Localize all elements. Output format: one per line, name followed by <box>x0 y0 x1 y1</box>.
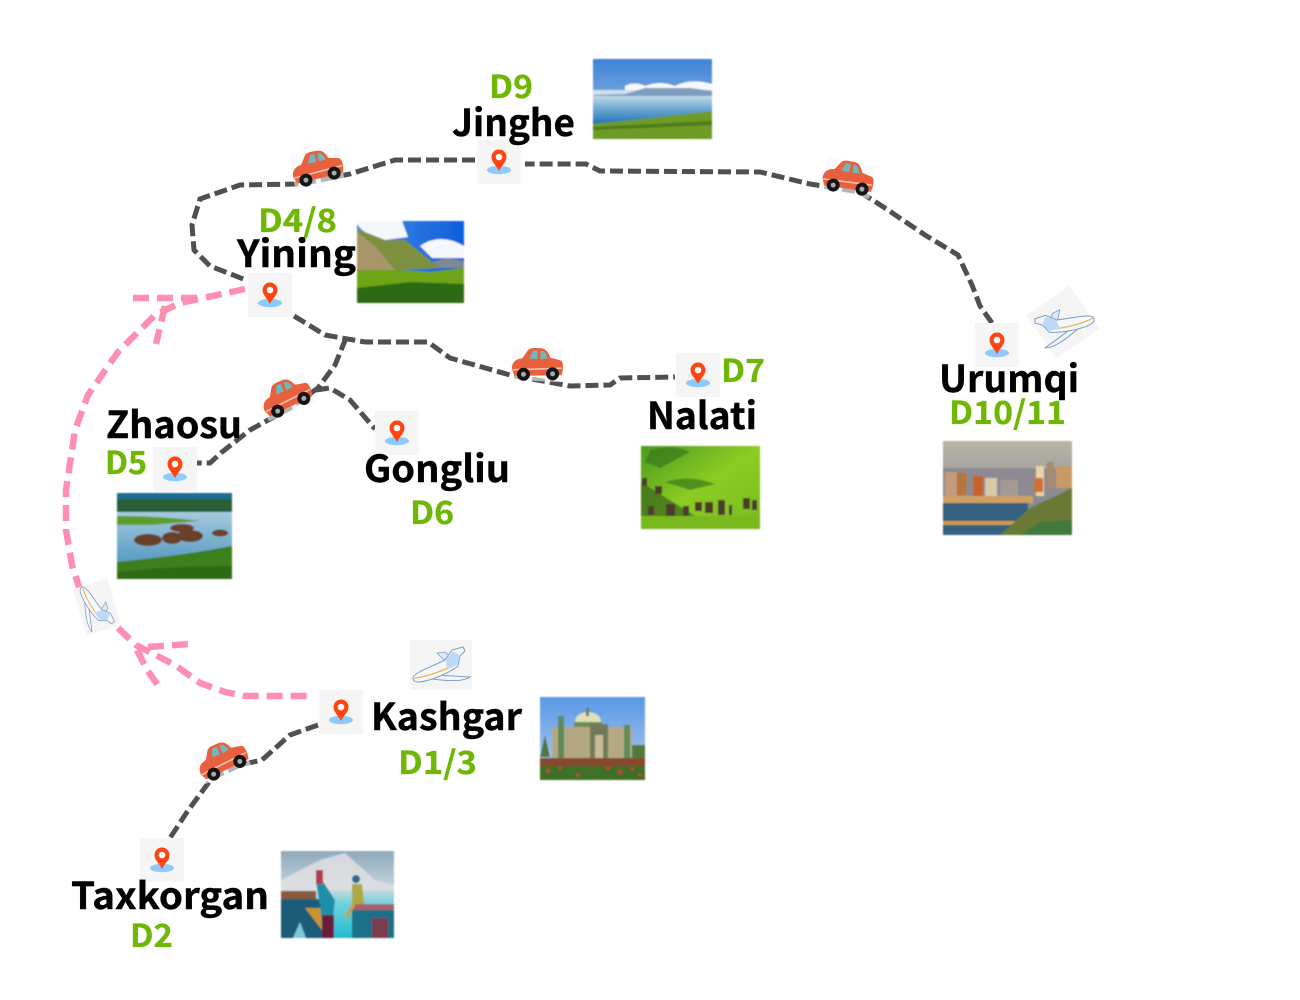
icon: car on Jinghe-Yining road <box>289 147 345 189</box>
label: D5: D5 <box>105 438 147 484</box>
pin: Yining <box>248 273 292 317</box>
label: D10/11: D10/11 <box>949 388 1066 434</box>
stop: Zhaosu <box>105 395 242 579</box>
name: Urumqi: Urumqi <box>939 349 1079 403</box>
icon: car on Zhaosu road <box>256 371 316 422</box>
stop: Jinghe <box>452 59 712 184</box>
route: Yining to Nalati <box>294 316 675 386</box>
icon: car on Kashgar-Taxkorgan road <box>192 734 252 785</box>
pin: Kashgar <box>319 690 363 734</box>
label: D4/8: D4/8 <box>258 196 337 242</box>
icon: plane at Kashgar <box>410 640 472 690</box>
icon: plane at Urumqi <box>1027 286 1099 358</box>
label: D2: D2 <box>130 911 173 957</box>
pin: Jinghe <box>477 140 521 184</box>
photo: lake with green shore <box>593 59 712 139</box>
photo: green mountain valley <box>357 221 464 303</box>
icon: plane on flight path <box>73 579 121 635</box>
photo: city skyline <box>943 441 1072 535</box>
name: Yining: Yining <box>236 224 356 278</box>
pin: Nalati <box>676 353 720 397</box>
stop: Kashgar <box>319 687 645 784</box>
icon: car on Yining-Nalati road <box>511 347 564 383</box>
label: D9: D9 <box>489 62 533 108</box>
label: D1/3: D1/3 <box>398 738 477 784</box>
route: Urumqi to Jinghe <box>525 164 992 323</box>
name: Kashgar: Kashgar <box>371 687 523 741</box>
stop: Urumqi <box>939 323 1079 535</box>
icon: car on Urumqi-Jinghe road <box>820 156 877 200</box>
stop: Yining <box>236 196 464 317</box>
pin: Taxkorgan <box>140 838 184 882</box>
photo: green hills with horses <box>641 446 760 529</box>
route: branch to Gongliu <box>316 388 375 429</box>
label: D6: D6 <box>410 488 454 534</box>
stop: Taxkorgan <box>71 838 394 957</box>
label: D7: D7 <box>721 346 765 392</box>
name: Zhaosu: Zhaosu <box>106 395 242 449</box>
photo: lake with two figures in traditional dress <box>281 851 394 938</box>
route: Yining branch to Zhaosu <box>197 338 346 463</box>
route: Kashgar to Taxkorgan <box>170 725 318 838</box>
name: Jinghe: Jinghe <box>452 93 575 147</box>
pin: Gongliu <box>375 411 419 455</box>
stop: Gongliu <box>364 411 510 534</box>
stop: Nalati <box>641 346 765 529</box>
pin: Urumqi <box>975 323 1019 367</box>
photo: mosque and red flowers <box>540 697 645 780</box>
name: Gongliu: Gongliu <box>364 439 510 493</box>
name: Nalati: Nalati <box>647 386 757 440</box>
name: Taxkorgan: Taxkorgan <box>71 866 269 920</box>
route: Jinghe to Yining <box>192 160 475 280</box>
photo: horses running through river <box>117 493 232 579</box>
flight route: Yining to Kashgar <box>66 289 312 696</box>
pin: Zhaosu <box>153 447 197 491</box>
